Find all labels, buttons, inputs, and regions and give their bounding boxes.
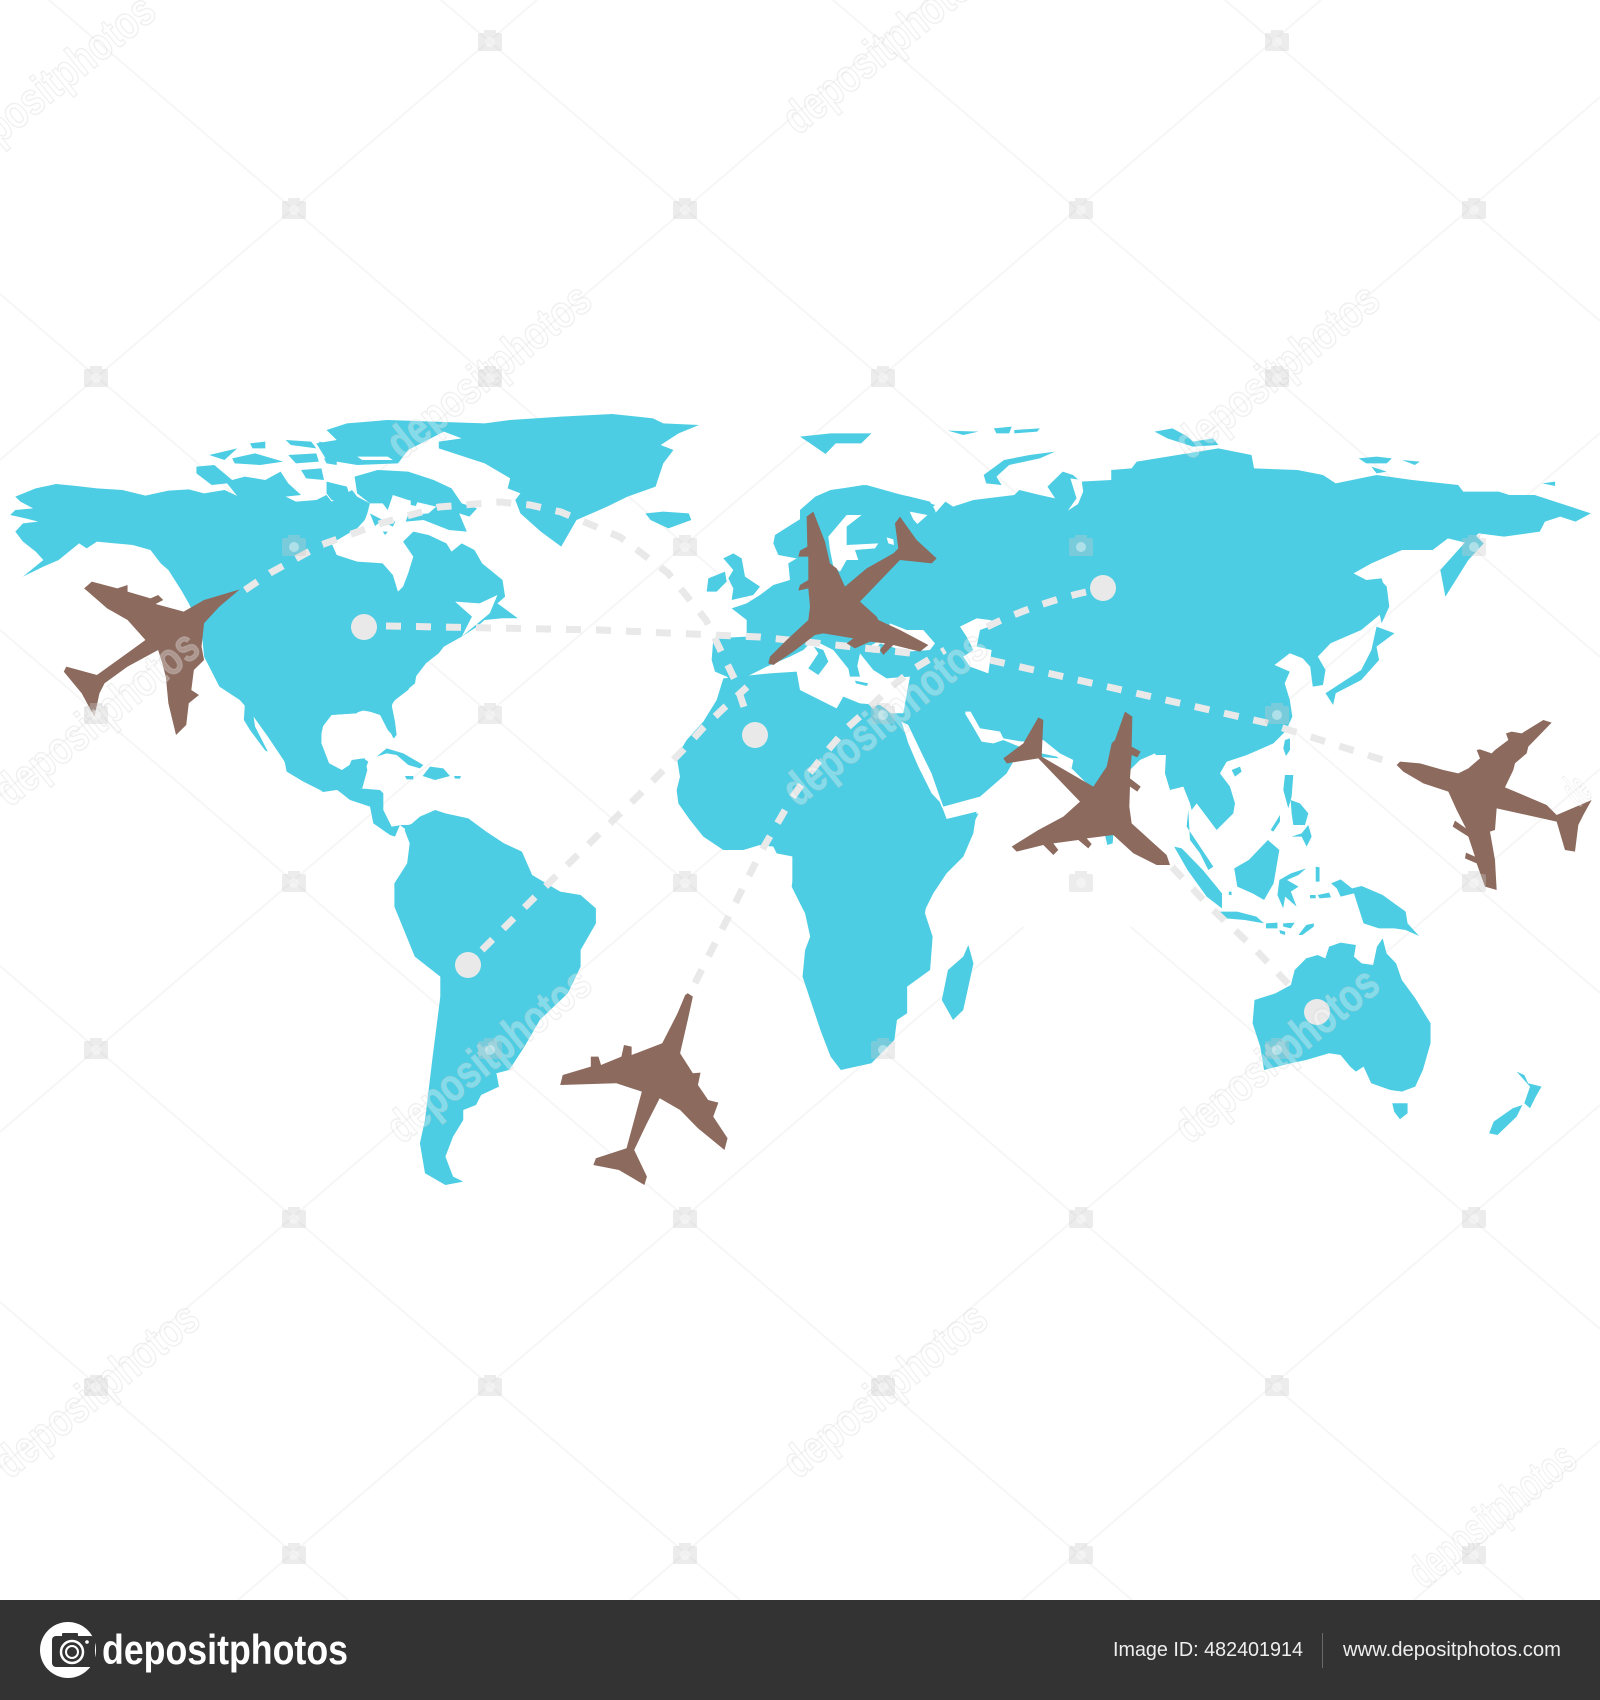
white seas: north Russia — [910, 478, 1083, 524]
continent: North America — [10, 414, 699, 792]
continent: South America — [394, 810, 596, 1185]
watermark: depositphotos repeated: depositphotos — [1164, 956, 1389, 1153]
airplane: South Atlantic — [560, 993, 728, 1185]
watermark: depositphotos repeated: depositphotos — [772, 619, 997, 816]
website url: www.depositphotos.com — [1342, 1638, 1561, 1661]
airplane: India — [1003, 712, 1170, 865]
Kamchatka, Sakhalin and Japan — [1440, 533, 1484, 597]
route: Pacific plane over North America to Africa — [245, 502, 745, 710]
route: South plane to Middle East — [695, 650, 945, 983]
islands: Indonesia and Australia — [1174, 840, 1542, 1135]
Iceland — [645, 512, 691, 528]
airplanes — [64, 512, 1592, 1185]
route: Caspian to East Asia and east plane — [990, 660, 1383, 760]
dot: Australia — [1304, 999, 1330, 1025]
destination dots — [351, 575, 1330, 1025]
airplane: North America west — [64, 582, 240, 735]
Baja California — [244, 703, 268, 752]
icon: depositphotos camera logo — [40, 1622, 96, 1678]
dot: Russia — [1090, 575, 1116, 601]
Arabia southern edge — [908, 713, 1023, 807]
white seas: Baltic and Mediterranean — [730, 515, 998, 713]
continent: Africa — [677, 672, 979, 1070]
watermark: depositphotos repeated: depositphotos — [1164, 272, 1389, 469]
watermark: depositphotos repeated: depositphotos — [376, 956, 601, 1153]
islands: Arctic Russia — [800, 427, 1555, 705]
airplane: East Pacific — [1397, 720, 1592, 890]
continent: Central America and Caribbean — [280, 650, 461, 837]
watermark: depositphotos repeated: depositphotos — [376, 272, 601, 469]
white: Red Sea and Gulf of Aden — [902, 722, 977, 819]
Greenland — [316, 414, 699, 547]
route: South America to North Africa — [482, 687, 747, 950]
continent: Southeast Asia — [1105, 707, 1312, 870]
flight routes — [245, 502, 1383, 990]
dot: North Africa — [742, 722, 768, 748]
watermark: camera grid — [84, 30, 1486, 1564]
footer bar — [0, 1600, 1600, 1700]
Baffin Island — [355, 470, 477, 532]
white: Indian Ocean — [933, 712, 1227, 927]
route: Russia to Caspian — [985, 592, 1086, 628]
route: North America to Europe — [386, 626, 910, 653]
dot: South America — [455, 952, 481, 978]
image id: Image ID: 482401914 — [1113, 1638, 1303, 1661]
world map — [10, 414, 1591, 1185]
Arctic islands — [209, 448, 237, 460]
continent: Europe — [712, 485, 957, 747]
watermark: depositphotos repeated: depositphotos — [772, 1291, 997, 1488]
Italy and Balkans — [808, 647, 868, 686]
airplane: Europe — [768, 512, 937, 665]
white: Bay of Bengal and South China Sea — [1100, 730, 1300, 827]
white: Persian Gulf — [965, 712, 1025, 747]
dot: North America — [351, 614, 377, 640]
continent: Australia — [1253, 938, 1431, 1092]
logo wordmark: depositphotos — [102, 1626, 348, 1673]
islands: UK and Ireland — [707, 553, 760, 600]
route: India plane to Australia — [1172, 867, 1294, 990]
continent: Eurasia — [800, 448, 1591, 800]
